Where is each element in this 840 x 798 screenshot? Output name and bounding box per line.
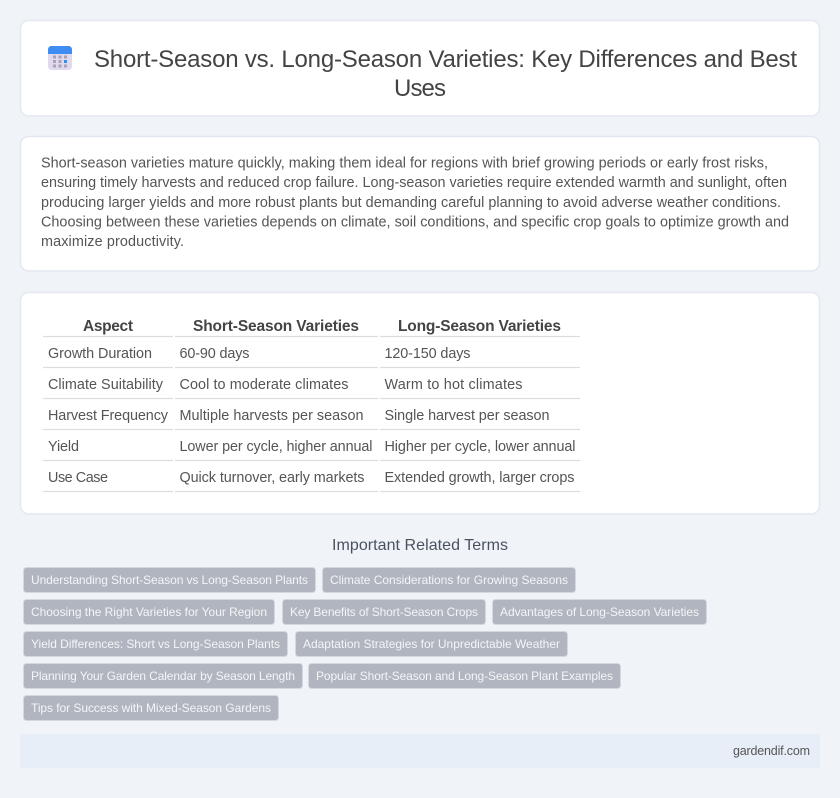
table header: Short-Season Varieties bbox=[193, 318, 359, 335]
tag bbox=[308, 664, 620, 688]
text block: description: Short-season varieties mature quickly, making them ideal for regions with brief growing periods or early frost risks, bbox=[41, 156, 768, 172]
footer: gardendif.com bbox=[733, 744, 810, 758]
icon: calendar bbox=[48, 46, 72, 70]
table header: Aspect bbox=[83, 318, 133, 335]
tag bbox=[24, 696, 278, 720]
title: Short-Season vs. Long-Season Varieties: Key Differences and Best bbox=[94, 46, 797, 73]
table row: growth duration: 60-90 days bbox=[180, 346, 250, 362]
text block: description: ensuring timely harvests and reduced crop failure. Long-season varieties require extended warmth and sunlight, often bbox=[41, 175, 787, 191]
tag bbox=[24, 600, 274, 624]
tag: Choosing the Right Varieties for Your Region bbox=[31, 605, 267, 619]
text block: description: Choosing between these varieties depends on climate, soil conditions, and specific crop goals to optimize growth and bbox=[41, 214, 789, 230]
tag bbox=[282, 600, 486, 624]
table row: use case: Quick turnover, early markets bbox=[180, 470, 364, 486]
table row: use case bbox=[48, 470, 574, 486]
panel: intro text bbox=[20, 136, 820, 271]
table row: yield bbox=[48, 439, 576, 455]
table header: Long-Season Varieties bbox=[398, 318, 561, 335]
panel: comparison table bbox=[20, 292, 820, 514]
tag: Tips for Success with Mixed-Season Gardens bbox=[31, 701, 271, 715]
tag bbox=[24, 632, 288, 656]
table row: yield: Higher per cycle, lower annual bbox=[384, 439, 576, 455]
table header bbox=[83, 318, 561, 335]
table row: use case: Use Case bbox=[48, 470, 108, 486]
panel: title header bbox=[20, 20, 820, 116]
tag: Understanding Short-Season vs Long-Season Plants bbox=[31, 573, 308, 587]
tag: Popular Short-Season and Long-Season Plant Examples bbox=[316, 669, 613, 683]
table row: growth duration: 120-150 days bbox=[384, 346, 470, 362]
table row: climate suitability: Climate Suitability bbox=[48, 377, 164, 393]
tag: Yield Differences: Short vs Long-Season Plants bbox=[31, 637, 280, 651]
tag: Planning Your Garden Calendar by Season Length bbox=[31, 669, 295, 683]
tag bbox=[24, 568, 316, 592]
tag: Adaptation Strategies for Unpredictable Weather bbox=[303, 637, 560, 651]
table row: climate suitability: Warm to hot climates bbox=[384, 377, 522, 393]
tag: Climate Considerations for Growing Seasons bbox=[330, 573, 568, 587]
table row: harvest frequency: Harvest Frequency bbox=[48, 408, 169, 424]
tag bbox=[492, 600, 706, 624]
title bbox=[94, 46, 797, 102]
text block: description bbox=[41, 156, 789, 250]
tag: Key Benefits of Short-Season Crops bbox=[290, 605, 478, 619]
text block: description: producing larger yields and more robust plants but demanding careful planning to avoid adverse weather conditions. bbox=[41, 195, 781, 211]
tag bbox=[24, 664, 302, 688]
table row: harvest frequency: Multiple harvests per season bbox=[180, 408, 364, 424]
table row: growth duration bbox=[48, 346, 470, 362]
tag bbox=[296, 632, 568, 656]
table row: climate suitability bbox=[48, 377, 522, 393]
table row: growth duration: Growth Duration bbox=[48, 346, 152, 362]
tag list: related terms bbox=[24, 568, 706, 720]
heading: important related terms: Important Related Terms bbox=[332, 537, 508, 554]
tag: Advantages of Long-Season Varieties bbox=[500, 605, 699, 619]
footer bbox=[20, 734, 820, 768]
table row: use case: Extended growth, larger crops bbox=[384, 470, 574, 486]
table row: harvest frequency bbox=[48, 408, 550, 424]
table row: yield: Lower per cycle, higher annual bbox=[180, 439, 372, 455]
tag bbox=[322, 568, 576, 592]
table row: harvest frequency: Single harvest per season bbox=[384, 408, 550, 424]
table row: yield: Yield bbox=[48, 439, 79, 455]
text block: description: maximize productivity. bbox=[41, 234, 184, 250]
table row: climate suitability: Cool to moderate climates bbox=[180, 377, 348, 393]
title: Uses bbox=[394, 75, 446, 102]
